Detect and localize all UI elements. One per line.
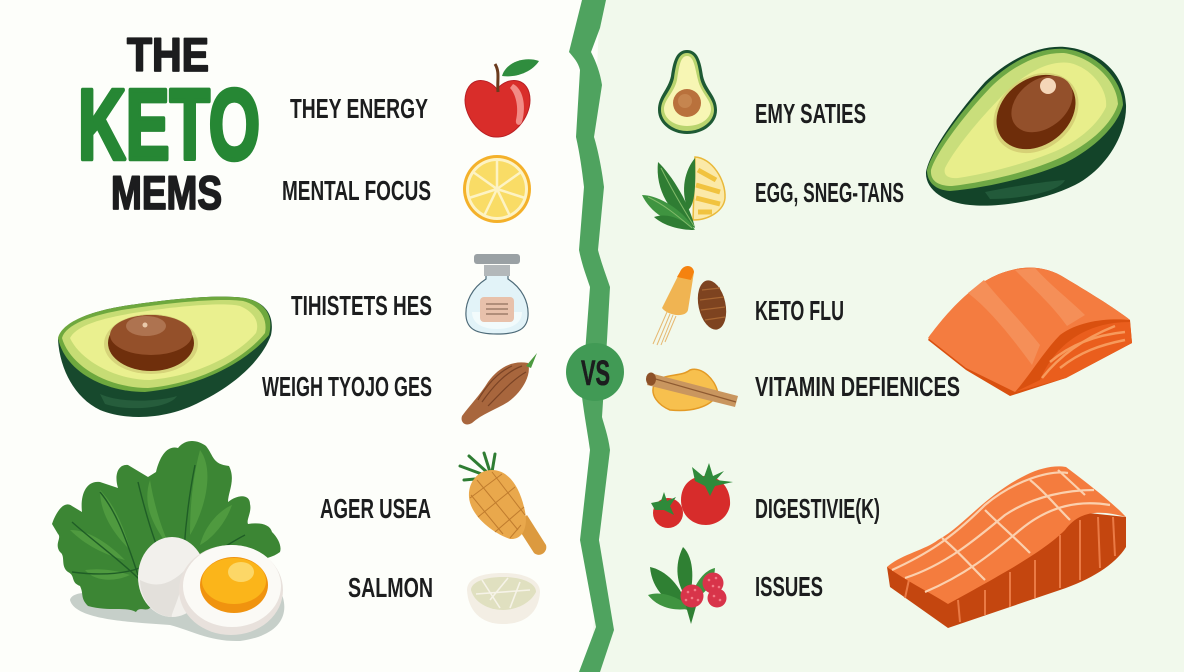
icon: tomatoes bbox=[651, 463, 733, 528]
icon: bottle bbox=[466, 254, 528, 334]
whole egg bbox=[138, 537, 206, 617]
shadow under eggs bbox=[70, 590, 284, 641]
illustration: greens and eggs bbox=[52, 441, 284, 641]
title: THE bbox=[127, 28, 209, 81]
illustration: upper salmon bbox=[928, 268, 1132, 396]
icon: brown pepper bbox=[462, 353, 537, 424]
label: weigh tyojo ges: WEIGH TYOJO GES bbox=[262, 371, 432, 402]
icon: lemon slice bbox=[463, 155, 531, 223]
icon: cinnamon and orange bbox=[646, 369, 738, 410]
label: keto flu: KETO FLU bbox=[755, 295, 844, 326]
icon: pineapple drumstick bbox=[460, 453, 546, 555]
label: egg sneg-tans: EGG, SNEG-TANS bbox=[755, 177, 904, 208]
label: tihistets hes: TIHISTETS HES bbox=[291, 290, 432, 321]
icon: small avocado bbox=[658, 50, 717, 134]
badge: VS: VS bbox=[581, 354, 610, 393]
icon: leaves and lemon bbox=[642, 157, 725, 230]
illustration: lower salmon bbox=[887, 466, 1126, 628]
icon: apple bbox=[465, 59, 539, 137]
title: MEMS bbox=[111, 166, 222, 219]
icon: berries and leaves bbox=[648, 547, 726, 624]
illustration: right avocado bbox=[926, 47, 1126, 206]
title bbox=[78, 28, 260, 219]
label: emy saties: EMY SATIES bbox=[755, 98, 866, 129]
label: mental focus: MENTAL FOCUS bbox=[282, 175, 431, 206]
label: issues: ISSUES bbox=[755, 571, 823, 602]
title: KETO bbox=[78, 69, 260, 181]
panel: right background bbox=[590, 0, 1184, 672]
cut egg bbox=[179, 545, 283, 635]
divider: jagged green line bbox=[569, 0, 614, 672]
label: vitamin defienices: VITAMIN DEFIENICES bbox=[755, 371, 960, 402]
icon: pale bowl bbox=[467, 573, 540, 624]
badge: VS bbox=[566, 343, 624, 401]
label: digestivie: DIGESTIVIE(K) bbox=[755, 493, 880, 524]
label: they energy: THEY ENERGY bbox=[290, 93, 428, 124]
label: ager usea: AGER USEA bbox=[320, 493, 431, 524]
label: salmon: SALMON bbox=[348, 572, 433, 603]
leafy greens bbox=[52, 441, 281, 612]
illustration: left avocado bbox=[58, 297, 272, 417]
icon: brush and cone bbox=[653, 266, 730, 345]
